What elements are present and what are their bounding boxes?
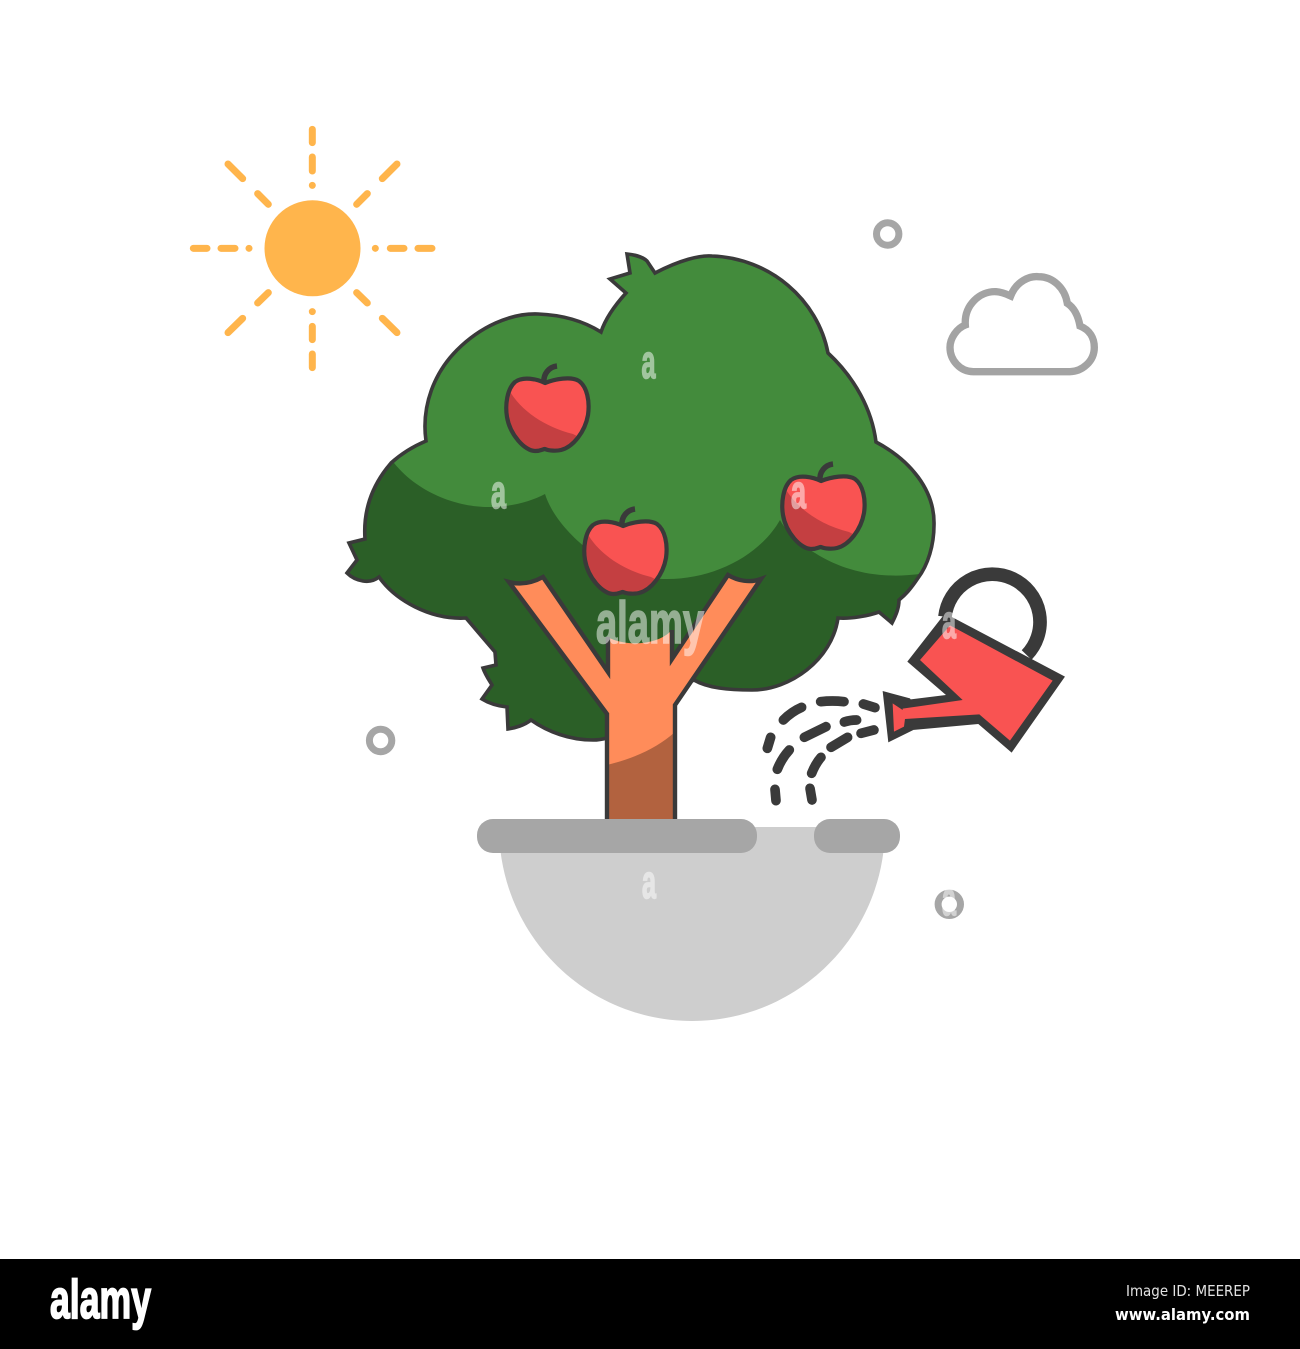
website: www.alamy.com — [1115, 1305, 1250, 1324]
watermark: a — [791, 465, 806, 518]
image id: Image ID: MEEREP — [1126, 1282, 1250, 1300]
tree crown — [340, 240, 960, 740]
watermark: a — [642, 855, 656, 908]
tree trunk — [509, 575, 761, 820]
cloud — [950, 277, 1094, 372]
watering can — [883, 574, 1065, 753]
footer bar — [0, 1259, 1300, 1349]
decorative ring: top right — [876, 223, 899, 245]
footer logo: alamy — [50, 1268, 151, 1330]
water drops — [767, 701, 875, 801]
decorative ring: left — [369, 729, 392, 752]
pot — [477, 819, 900, 1021]
apple: right — [778, 464, 865, 555]
sun — [193, 129, 432, 368]
apple: centre — [580, 509, 667, 600]
watermark: a — [491, 465, 506, 518]
decorative ring: lower right — [938, 893, 960, 916]
watermark: a — [942, 595, 956, 648]
watermark: alamy — [596, 590, 704, 656]
watermark: a — [942, 872, 956, 925]
watermark: a — [642, 335, 656, 388]
apple: upper left — [502, 366, 589, 457]
watermark — [491, 335, 956, 925]
